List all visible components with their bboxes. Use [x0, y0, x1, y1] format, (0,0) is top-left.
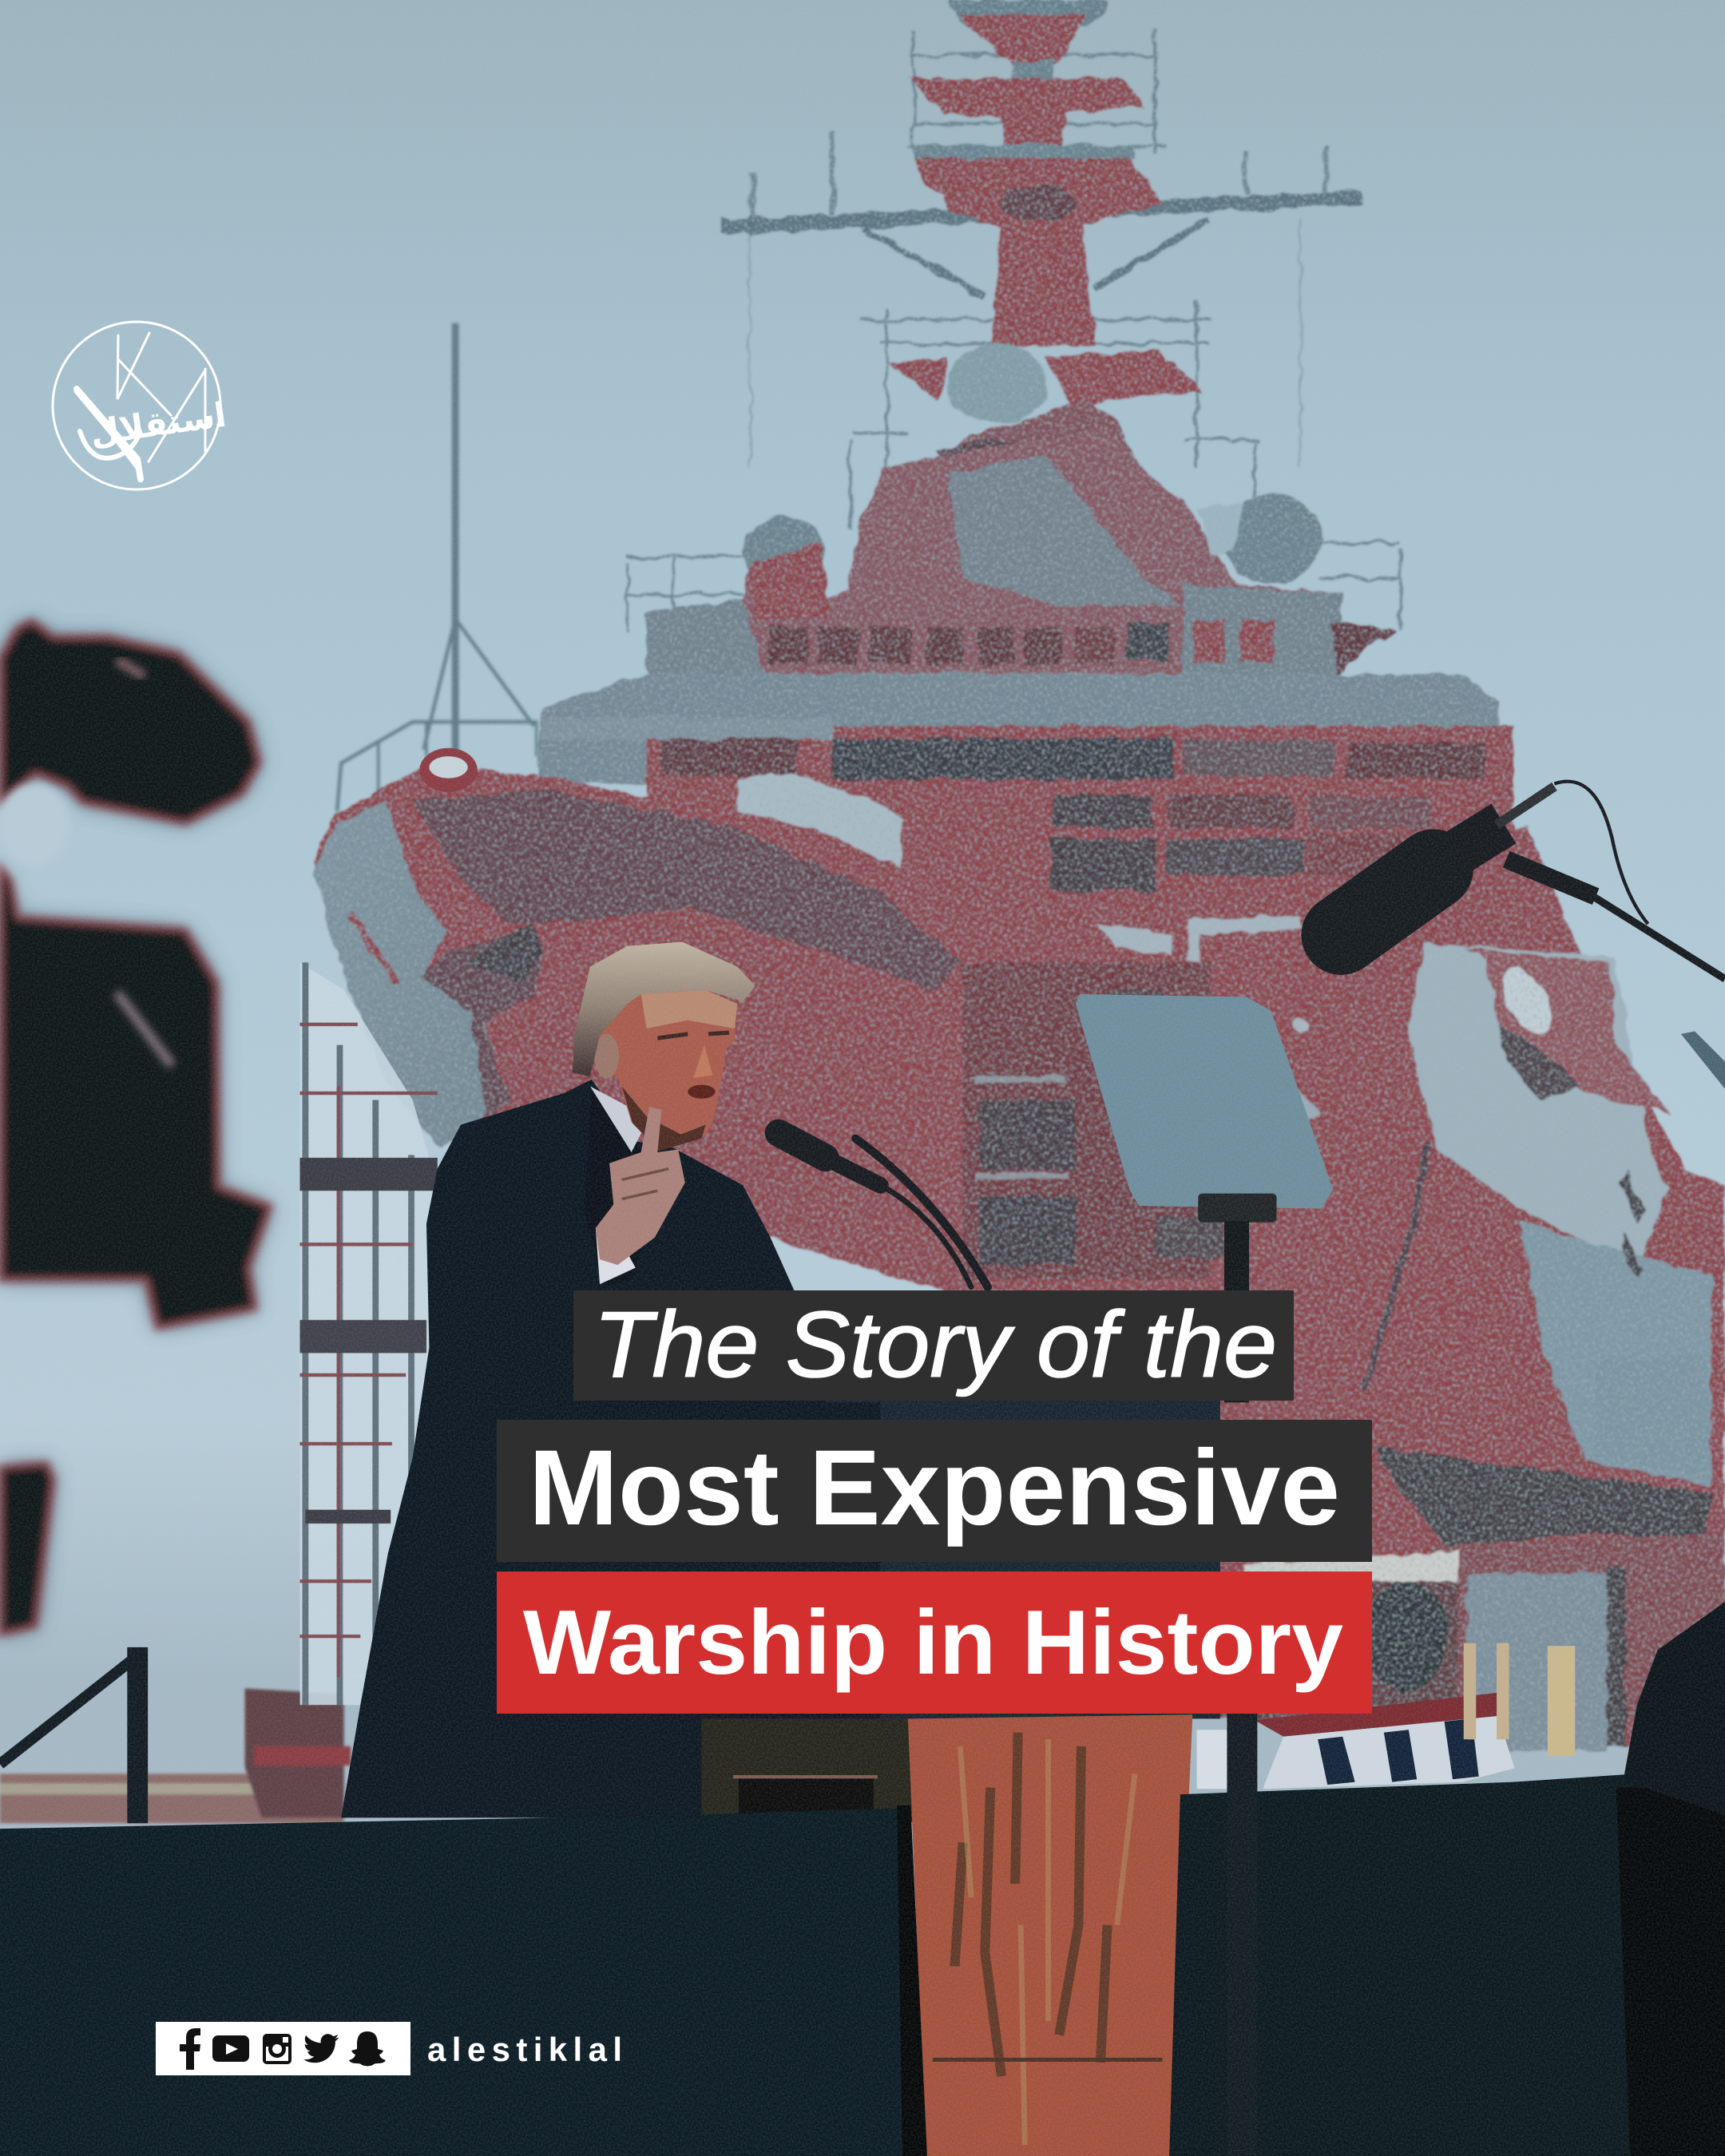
emblem flourishes	[76, 333, 205, 479]
nose	[693, 1045, 712, 1078]
collar	[590, 1086, 649, 1152]
icon: instagram	[263, 2034, 291, 2064]
foreground figure	[1624, 1602, 1725, 1815]
keel shadow	[1374, 1446, 1725, 1752]
heading line 3: Warship in History	[523, 1592, 1343, 1694]
podium microphone	[779, 1133, 988, 1287]
emblem wordmark: استقلال	[88, 394, 228, 453]
scaffolding	[300, 962, 440, 1705]
bow grey plating	[314, 802, 543, 1148]
bunting	[1197, 1643, 1575, 1789]
ladder structure	[963, 962, 1321, 1278]
heading line 1: The Story of the	[593, 1292, 1277, 1397]
harbor strip	[0, 1689, 351, 1823]
heading line 3	[497, 1571, 1372, 1714]
speaker coat	[341, 1080, 880, 1817]
speaker head	[573, 942, 755, 1152]
dock machinery	[1211, 1551, 1458, 1718]
aft grey plating	[1365, 943, 1712, 1486]
stage drapes	[0, 1774, 1725, 2156]
hair	[573, 942, 755, 1076]
bow lantern	[419, 748, 478, 792]
teleprompter	[1076, 994, 1333, 2156]
heading line 2: Most Expensive	[529, 1429, 1340, 1548]
foremast crossbar	[721, 132, 1362, 297]
speaker hand	[596, 1107, 685, 1284]
superstructure windows	[767, 621, 1396, 674]
boom microphone	[1341, 782, 1725, 1089]
superstructure	[647, 426, 1341, 674]
forehead	[641, 990, 737, 1028]
mast scaffolding	[627, 30, 1400, 632]
icon: snapchat	[349, 2031, 386, 2067]
blurred camera foreground	[0, 620, 271, 1635]
face	[596, 990, 737, 1150]
bow mast and rails	[337, 323, 537, 811]
lectern base and back panel	[695, 1400, 1220, 1822]
mouth	[688, 1085, 716, 1099]
icon: facebook	[180, 2028, 200, 2070]
warship	[314, 0, 1725, 1752]
eyes	[657, 1032, 729, 1038]
radar platform and dome	[889, 343, 1204, 522]
social media bar	[156, 2022, 410, 2075]
mast tower	[908, 0, 1163, 347]
handle text: alestiklal	[427, 2031, 622, 2068]
handrail	[0, 1647, 143, 1823]
logo emblem	[53, 322, 228, 489]
deck cage and windows	[660, 739, 1485, 962]
wooden lectern	[908, 1714, 1192, 2156]
beard shadow	[622, 1086, 706, 1151]
icon: twitter	[303, 2034, 339, 2063]
hull	[314, 763, 1725, 1746]
icon: youtube	[212, 2035, 249, 2062]
ear	[594, 1034, 619, 1078]
main deck	[537, 674, 1513, 967]
